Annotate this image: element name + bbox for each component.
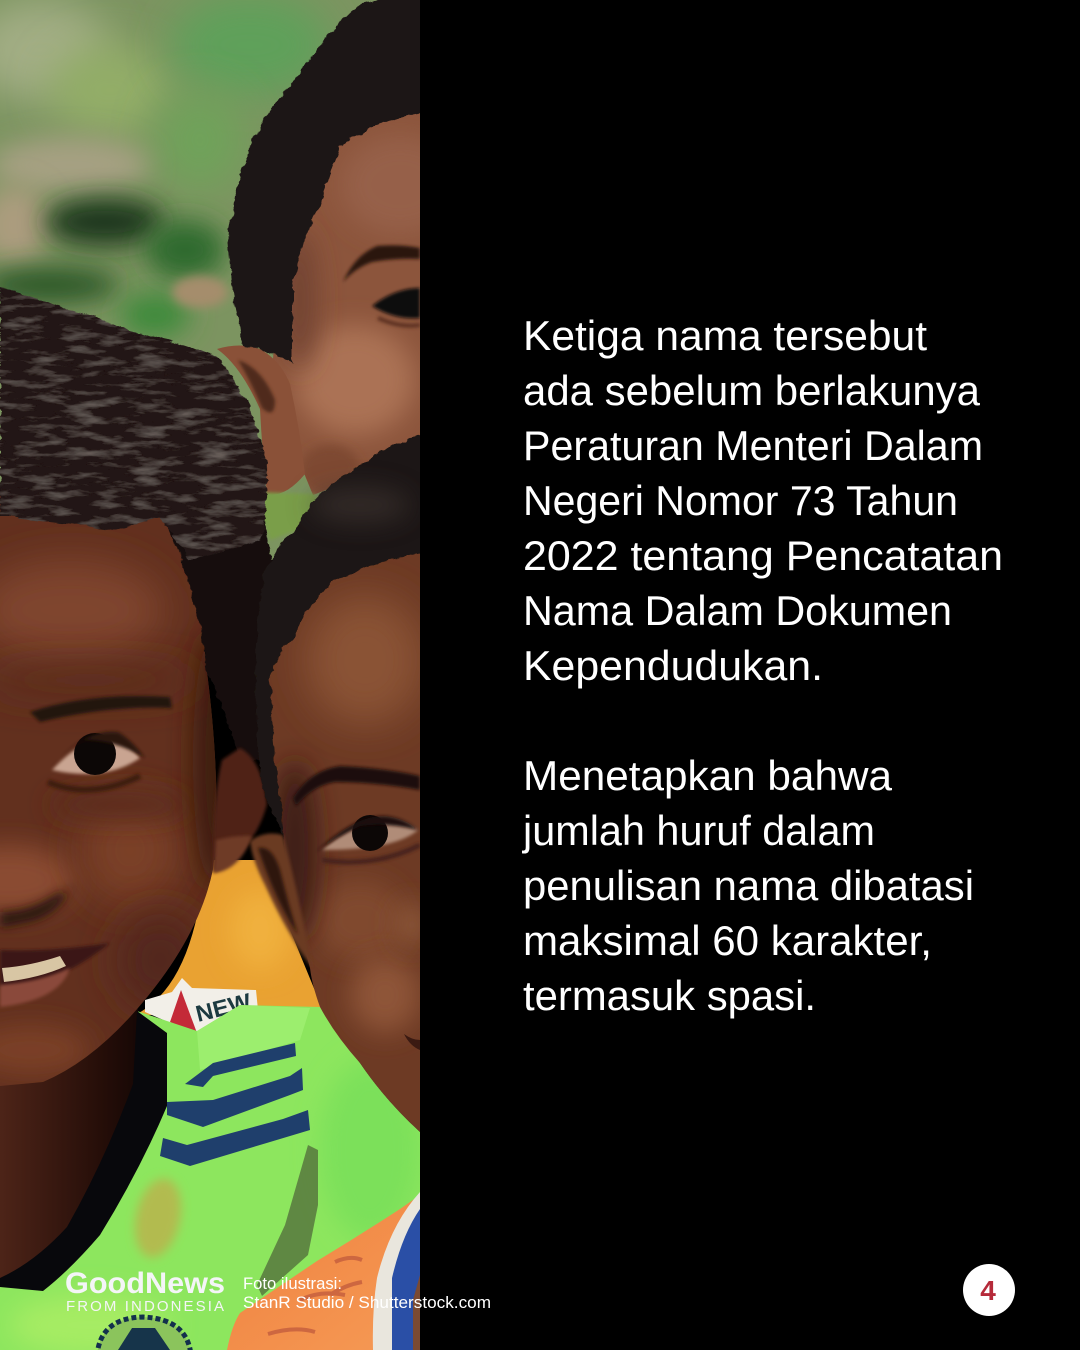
left boy: [0, 289, 285, 1291]
text block: second paragraph: [521, 752, 974, 1019]
text block: first paragraph: Peraturan Menteri Dalam: [523, 422, 983, 469]
photo credit: StanR Studio / Shutterstock.com: [243, 1294, 491, 1312]
left boy: face: [0, 496, 216, 1086]
back boy: hair: [229, 0, 425, 362]
left boy: black collar: [0, 1011, 167, 1291]
photo background: blurred foliage: [0, 0, 378, 560]
text block: first paragraph: ada sebelum berlakunya: [523, 367, 981, 414]
text block: first paragraph: Nama Dalam Dokumen: [523, 587, 952, 634]
jersey: stain: [131, 1175, 185, 1261]
logo: GoodNews from Indonesia: FROM INDONESIA: [66, 1298, 224, 1315]
text block: second paragraph: Menetapkan bahwa: [523, 752, 893, 799]
back boy: eye: [372, 288, 420, 318]
orange shirt: white trim: [373, 1192, 420, 1350]
orange shirt: blue collar: [392, 1209, 420, 1350]
green jersey: [0, 1005, 420, 1350]
right boy: mouth: [404, 1034, 420, 1050]
jersey: side mesh: [257, 1145, 318, 1296]
right boy: hair: [255, 435, 425, 838]
left boy: hair: [0, 289, 267, 560]
back boy: ear: [217, 346, 305, 495]
back boy: [217, 0, 420, 495]
text block: second paragraph: termasuk spasi.: [523, 972, 816, 1019]
text block: second paragraph: penulisan nama dibatasi: [523, 862, 974, 909]
back boy: eyebrow: [343, 245, 420, 282]
right boy: [250, 435, 426, 1140]
text block: first paragraph: Ketiga nama tersebut: [523, 312, 927, 359]
orange shirt: [227, 1192, 420, 1350]
left boy: ear: [213, 748, 267, 873]
logo: GoodNews from Indonesia: GoodNews: [65, 1267, 225, 1300]
photo: three children: [0, 0, 460, 1350]
text block: first paragraph: [523, 312, 1003, 689]
shirt print: red star: [170, 990, 197, 1033]
left boy: neck: [0, 1008, 138, 1278]
shirt print: NEW text: NEW: [193, 988, 254, 1027]
yellow shirt: [135, 860, 325, 1036]
right boy: eye: [316, 815, 420, 862]
right boy: ear: [250, 833, 312, 968]
text block: second paragraph: maksimal 60 karakter,: [523, 917, 932, 964]
photo credit: [243, 1275, 491, 1312]
jersey: badge: [97, 1317, 191, 1350]
logo: GoodNews from Indonesia: [65, 1267, 225, 1315]
left boy: eye: [48, 732, 145, 790]
text block: first paragraph: Negeri Nomor 73 Tahun: [523, 477, 958, 524]
right boy: eyebrow: [293, 766, 420, 806]
left boy: nose shadow: [0, 885, 72, 928]
text block: first paragraph: Kependudukan.: [523, 642, 823, 689]
right boy: face: [268, 554, 420, 1132]
jersey: stripes: [160, 1043, 310, 1166]
page number badge: [963, 1264, 1015, 1316]
green gap patch: [264, 490, 316, 540]
page number badge: 4: [980, 1275, 996, 1306]
left boy: dark hair at temple: [168, 520, 272, 760]
left boy: eyebrow: [30, 696, 172, 722]
shirt print: white badge: [145, 978, 258, 1036]
text block: first paragraph: 2022 tentang Pencatatan: [523, 532, 1003, 579]
photo credit: Foto ilustrasi:: [243, 1275, 342, 1293]
back boy: skin: [273, 113, 420, 495]
left boy: mouth: [0, 943, 110, 1007]
text block: second paragraph: jumlah huruf dalam: [521, 807, 875, 854]
